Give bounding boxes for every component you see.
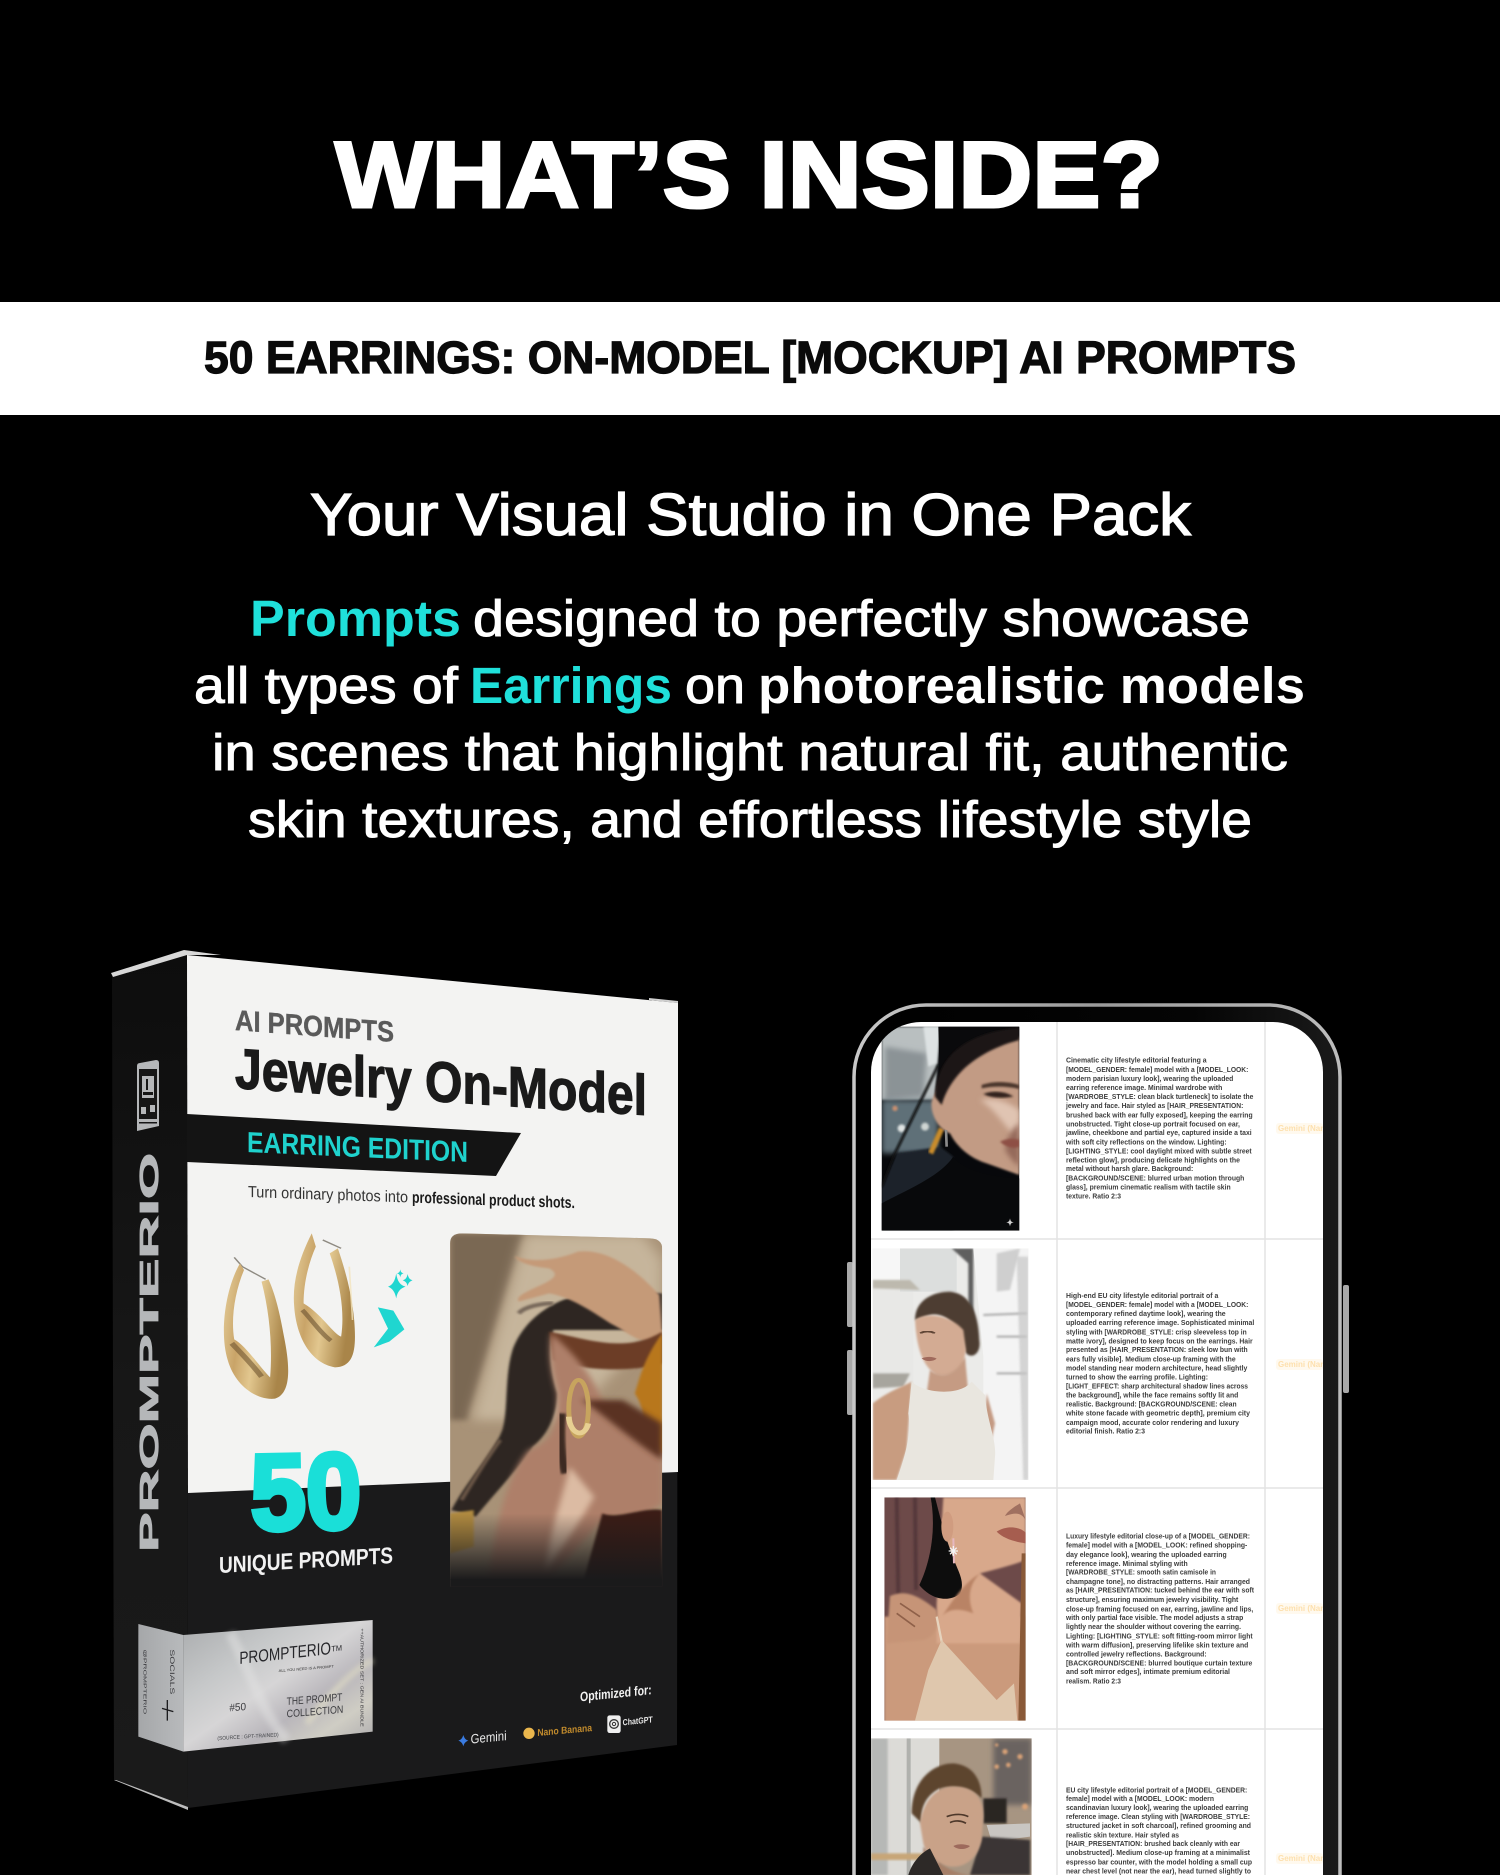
prompt text: row 3: close-up framing focused on ear, earring, jawline and lips, [1066, 1604, 1253, 1613]
prompt text: row 1: [WARDROBE_STYLE: clean black turtleneck] to isolate the [1066, 1092, 1253, 1101]
prompt text: row 3: Lighting: [LIGHTING_STYLE: soft fitting-room mirror light [1066, 1631, 1253, 1640]
prompt text: row 1: unobstructed. Tight close-up portrait focused on ear, [1066, 1119, 1240, 1128]
phone frame [854, 1005, 1340, 1875]
prompt text: row 3: with only partial face visible. The model adjusts a strap [1065, 1613, 1244, 1622]
prompt text: row 1: brushed back with ear fully exposed], keeping the earring [1066, 1110, 1253, 1119]
prompt text: row 2: [LIGHT_EFFECT: sharp architectural shadow lines across [1066, 1382, 1248, 1391]
holographic label: SOCIALS [168, 1649, 174, 1694]
prompt text: row 1: [BACKGROUND/SCENE: blurred urban motion through [1066, 1174, 1245, 1183]
banner: product name: 50 EARRINGS: ON-MODEL [MOCKUP] AI PROMPTS [204, 332, 1296, 383]
prompt text: row 2: the background], while the face remains softly lit and [1066, 1390, 1239, 1399]
description text block: in scenes that highlight natural fit, authentic [212, 724, 1288, 781]
prompt text: row 3: realism. Ratio 2:3 [1066, 1676, 1121, 1685]
prompt text: row 3: and soft mirror edges], intimate premium editorial [1066, 1667, 1230, 1676]
prompt text: row 3: as [HAIR_PRESENTATION: tucked behind the ear with soft [1066, 1586, 1254, 1595]
hoop earring [569, 1380, 588, 1437]
prompt text: row 3: female] model with a [MODEL_LOOK: refined shopping- [1066, 1541, 1248, 1550]
phone side buttons [847, 1262, 1349, 1415]
optimized for logos: Optimized for: [580, 1682, 652, 1704]
prompt text: row 2: styling with [WARDROBE_STYLE: crisp sleeveless top in [1066, 1327, 1247, 1336]
prompt text: row 2: uploaded earring reference image. Sophisticated minimal [1066, 1318, 1254, 1327]
prompt text: row 1: texture. Ratio 2:3 [1066, 1191, 1121, 1200]
ear and neck skin [496, 1333, 662, 1552]
prompt text: row 3: reference image. Minimal styling with [1066, 1559, 1188, 1568]
prompt text: row 3: Luxury lifestyle editorial close-up of a [MODEL_GENDER: [1066, 1532, 1250, 1541]
optimized for logos: Nano Banana [537, 1723, 592, 1739]
prompt text: row 2: turned to show the earring profile. Lighting: [1066, 1372, 1208, 1381]
prompt text: row 1: with soft city reflections on the window. Lighting: [1065, 1137, 1227, 1146]
box heading: jewelry on-model: Jewelry On-Model [235, 1037, 647, 1128]
description text block: on [685, 657, 745, 714]
title: WHAT’S INSIDE? [335, 122, 1163, 227]
edition ribbon [187, 1114, 521, 1176]
holographic label: PROMPTERIO [239, 1638, 331, 1668]
holographic label [138, 1620, 373, 1752]
number 50: 50 [249, 1430, 362, 1553]
prompt text: row 1: jewelry and face. Hair styled as [HAIR_PRESENTATION: [1065, 1101, 1243, 1110]
description text block: all types of [194, 657, 459, 714]
optimized for logos [458, 1682, 653, 1747]
prompt text: row 2: realistic. Background: [BACKGROUND/SCENE: clean [1066, 1399, 1237, 1408]
earrings product shot [224, 1233, 355, 1399]
icon: chatgpt [607, 1715, 621, 1733]
box heading: ai prompts: AI PROMPTS [235, 1005, 394, 1049]
prompt text: row 3: day elegance look], wearing the uploaded earring [1066, 1550, 1227, 1559]
description text block: photorealistic models [758, 657, 1305, 714]
prompt text: row 4: unobstructed]. Medium close-up framing at a minimalist [1066, 1848, 1250, 1857]
prompt text: row 1: [LIGHTING_STYLE: cool daylight mixed with subtle street [1066, 1146, 1252, 1155]
icon: spine logo [137, 1060, 159, 1131]
prompt text: row 4: reference image. Clean styling with [WARDROBE_STYLE: [1066, 1812, 1250, 1821]
model tags column: Gemini (Nano [1278, 1854, 1330, 1863]
banner: product name [0, 302, 1500, 415]
prompt text: row 4: structured jacket in soft charcoal], refined grooming and [1066, 1821, 1251, 1830]
prompt text: row 3: [BACKGROUND/SCENE: blurred boutique curtain texture [1066, 1658, 1252, 1667]
prompt text: row 4: female] model with a [MODEL_LOOK: modern [1066, 1794, 1214, 1803]
spine wordmark: PROMPTERIO [134, 1153, 164, 1552]
holographic label: ALL YOU NEED IS A PROMPT [279, 1665, 334, 1673]
holographic label: THE PROMPT [287, 1692, 343, 1708]
unique prompts label: UNIQUE PROMPTS [219, 1542, 393, 1578]
prompt text: row 4: espresso bar counter, with the model holding a small cup [1066, 1857, 1252, 1866]
prompt text: row 1: [MODEL_GENDER: female] model with a [MODEL_LOOK: [1066, 1065, 1248, 1074]
prompt text: row 3: champagne tone], no distracting patterns. Hair arranged [1066, 1577, 1250, 1586]
orange sleeve [634, 1334, 662, 1454]
prompt text: row 4: [HAIR_PRESENTATION: brushed back cleanly with ear [1066, 1839, 1240, 1848]
box front dark base [187, 955, 678, 1808]
holographic label: #50 [229, 1701, 246, 1714]
prompt text: row 3: controlled jewelry reflections. Background: [1066, 1649, 1207, 1658]
model tags column: Gemini (Nano [1278, 1604, 1330, 1613]
photo: boutique portrait [884, 1497, 1026, 1723]
prompt text: row 3 [1065, 1532, 1254, 1685]
optimized for logos: Gemini [471, 1728, 507, 1747]
prompt text: row 3: with warm diffusion], preserving lifelike skin texture and [1065, 1640, 1249, 1649]
subheading: Your Visual Studio in One Pack [310, 482, 1192, 548]
prompt text: row 2: contemporary refined daytime look], wearing the [1066, 1309, 1226, 1318]
box front white panel [187, 955, 678, 1493]
description text block [194, 590, 1305, 848]
prompt text: row 2: editorial finish. Ratio 2:3 [1066, 1427, 1145, 1436]
prompt text: row 2: matte ivory], designed to keep focus on the earrings. Hair [1066, 1336, 1253, 1345]
hand [515, 1251, 662, 1340]
prompt text: row 3: lightly near the shoulder without covering the earring. [1066, 1622, 1241, 1631]
prompt text: row 2: [MODEL_GENDER: female] model with a [MODEL_LOOK: [1066, 1300, 1248, 1309]
photo: taxi portrait [882, 1027, 1019, 1231]
table grid [871, 1022, 1323, 1875]
prompt text: row 1: reflection glow], producing delicate highlights on the [1066, 1155, 1240, 1164]
prompt text: row 2: High-end EU city lifestyle editorial portrait of a [1066, 1291, 1219, 1300]
holographic label: TM [331, 1643, 342, 1654]
box spine [111, 950, 678, 1810]
prompt text: row 1: jawline, cheekbone and partial eye, captured inside a taxi [1065, 1128, 1252, 1137]
prompt text: row 2: ears fully visible]. Medium close-up framing with the [1066, 1354, 1236, 1363]
phone mockup [847, 1005, 1349, 1875]
prompt text: row 1: metal without harsh glare. Background: [1066, 1164, 1193, 1173]
prompt text: row 4: scandinavian luxury look], wearing the uploaded earring [1066, 1803, 1249, 1812]
box tagline [248, 1184, 575, 1212]
prompt text: row 2 [1065, 1291, 1254, 1436]
holographic label: ++AUTHORIZED SET : GEN AI BUNDLE [359, 1628, 365, 1727]
model tags column: Gemini (Nano [1278, 1124, 1330, 1133]
prompt text: row 2: model standing near modern architecture, head slightly [1066, 1364, 1248, 1373]
icon: sparkle and arrow [374, 1269, 413, 1347]
prompt text: row 4: realistic skin texture. Hair styled as [1066, 1830, 1179, 1839]
holographic label: (SOURCE : GPT-TRAINED) [217, 1732, 279, 1742]
prompt text: row 3: structure], ensuring maximum jewelry visibility. Tight [1066, 1595, 1239, 1604]
prompt text: row 2: presented as [HAIR_PRESENTATION: sleek low bun with [1066, 1345, 1248, 1354]
holographic label: COLLECTION [287, 1704, 343, 1720]
prompt text: row 4 [1066, 1785, 1252, 1875]
edition ribbon: EARRING EDITION [247, 1127, 468, 1169]
photo: architecture portrait [873, 1248, 1028, 1480]
icon: nano banana [523, 1728, 535, 1739]
description text block: Earrings [470, 657, 672, 714]
description text block: skin textures, and effortless lifestyle style [248, 791, 1252, 848]
prompt text: row 1: earring reference image. Minimal wardrobe with [1066, 1083, 1223, 1092]
photo: espresso bar portrait [871, 1738, 1032, 1875]
description text block: designed to perfectly showcase [473, 590, 1250, 647]
box lifestyle photo [447, 1230, 668, 1590]
prompt text: row 1 [1065, 1056, 1253, 1200]
optimized for logos: ChatGPT [623, 1714, 653, 1727]
prompt text: row 1: Cinematic city lifestyle editorial featuring a [1066, 1056, 1207, 1065]
model tags column: Gemini (Nano [1278, 1360, 1330, 1369]
dress bottom [450, 1510, 474, 1553]
prompt text: row 2: white stone facade with geometric depth], premium city [1065, 1409, 1251, 1418]
box tagline: professional product shots. [412, 1190, 575, 1212]
phone screen [871, 1022, 1330, 1875]
box tagline: Turn ordinary photos into [248, 1184, 408, 1206]
prompt text: row 2: campaign mood, accurate color rendering and luxury [1066, 1418, 1240, 1427]
holographic label: @PROMPTERIO [141, 1649, 147, 1715]
description text block: Prompts [250, 590, 461, 647]
prompt text: row 1: glass], premium cinematic realism with tactile skin [1066, 1182, 1231, 1191]
icon: gemini [458, 1735, 468, 1746]
prompt text: row 1: modern parisian luxury look], wearing the uploaded [1066, 1074, 1234, 1083]
prompt text: row 3: [WARDROBE_STYLE: smooth satin camisole in [1066, 1568, 1216, 1577]
model tags column [1276, 1123, 1323, 1864]
hair [451, 1293, 662, 1517]
product box [111, 950, 678, 1810]
prompt text: row 4: EU city lifestyle editorial portrait of a [MODEL_GENDER: [1066, 1785, 1247, 1794]
